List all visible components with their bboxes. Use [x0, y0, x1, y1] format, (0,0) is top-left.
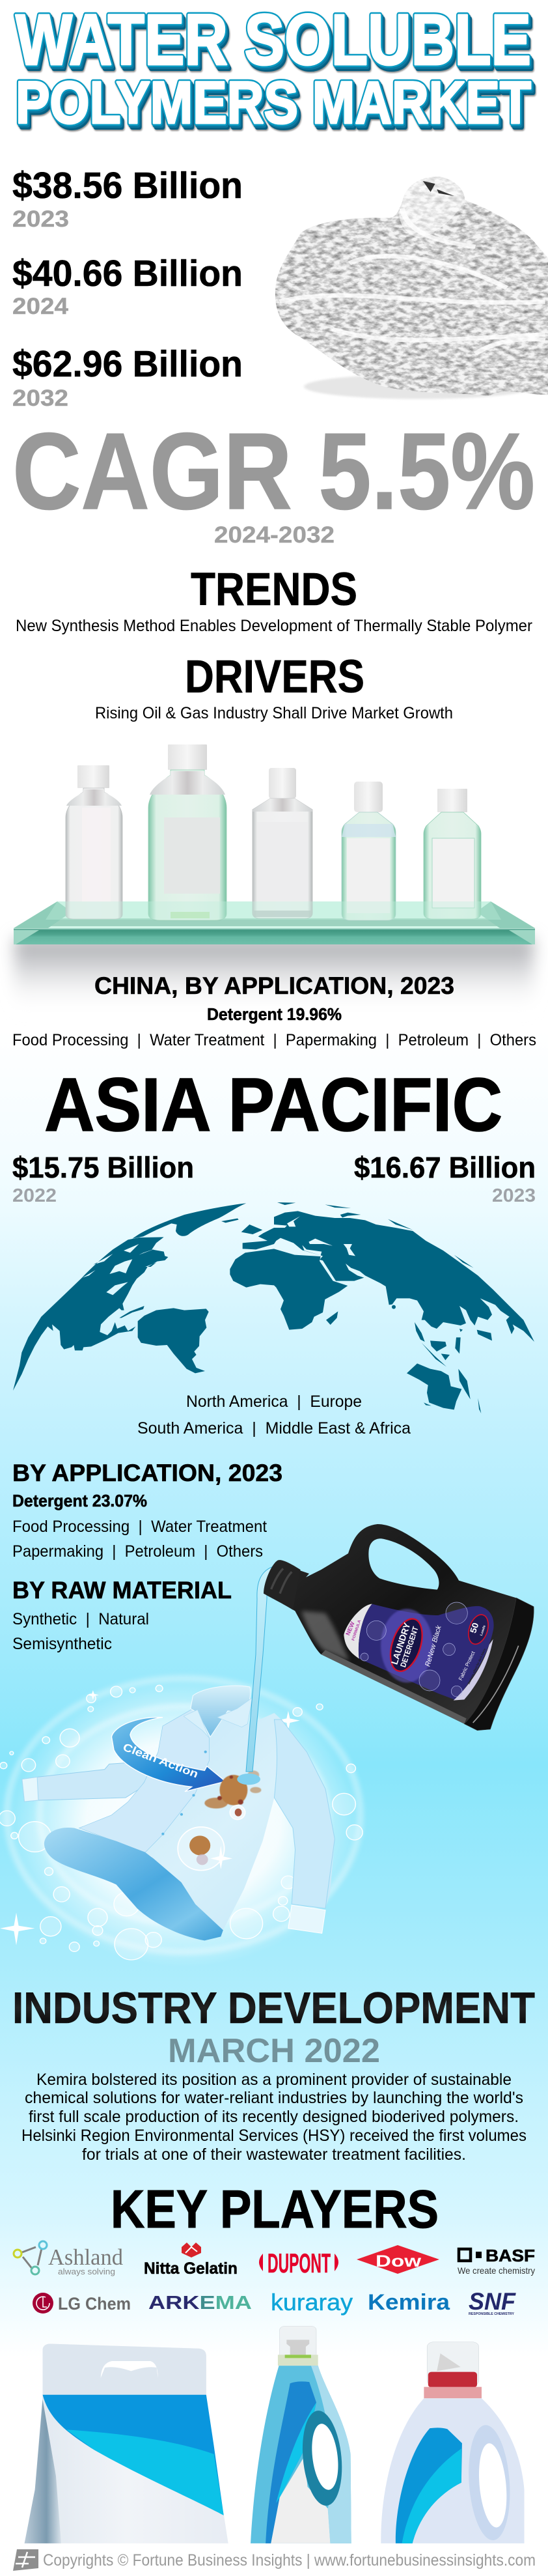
2024 label: 2024	[12, 294, 69, 319]
logo: Ashland: always solving	[58, 2267, 115, 2276]
label text: laundry: LAUNDRY	[389, 1621, 413, 1666]
raw material list line 1: Synthetic | Natural	[12, 1610, 149, 1628]
cap threads	[271, 1568, 292, 1594]
shirt buttons	[161, 1751, 207, 1835]
logo: SNF: SNF	[469, 2288, 516, 2315]
label text: fabric protect: Fabric Protect	[458, 1650, 476, 1682]
logo: Kuraray: kuraray	[271, 2289, 353, 2315]
label purple part	[359, 1604, 494, 1700]
market size figures	[12, 165, 243, 411]
Asia Pacific 2023 label: 2023	[492, 1185, 536, 1206]
label text: fifty: 50	[468, 1621, 480, 1634]
bottle body and handle	[269, 1524, 534, 1731]
industry development body: first full scale production of its recently designed bioderived polymers.	[29, 2108, 519, 2126]
shelf tint seen through bottles	[46, 901, 501, 920]
label bubbles	[361, 1602, 467, 1697]
industry development body	[21, 2071, 527, 2164]
detergent stream	[246, 1566, 273, 1772]
logo: LG Chem	[33, 2293, 131, 2314]
Asia Pacific 2022 value: $15.75 Billion	[12, 1151, 194, 1184]
detergent splash	[237, 1774, 260, 1785]
shirt body	[79, 1708, 335, 1930]
2024 value: $40.66 Billion	[12, 253, 243, 294]
badge oval	[465, 1612, 492, 1647]
footer logo	[13, 2549, 38, 2571]
China detergent share: Detergent 19.96%	[207, 1004, 342, 1024]
industry development body: Kemira bolstered its position as a prominent provider of sustainable	[36, 2071, 512, 2089]
clean action arrow	[111, 1718, 225, 1792]
left sleeve	[22, 1763, 149, 1802]
label text: detergent: DETERGENT	[398, 1625, 420, 1669]
application list line 2: Papermaking | Petroleum | Others	[12, 1542, 263, 1561]
product: detergent pouch	[25, 2344, 228, 2543]
label text: fine print: Darkens effect for dark fabric	[467, 1648, 487, 1684]
2032 value: $62.96 Billion	[12, 343, 243, 385]
bottle 1	[66, 765, 122, 919]
application list line 1: Food Processing | Water Treatment	[12, 1518, 267, 1536]
detergent bottle	[264, 1524, 534, 1731]
bottle cap	[264, 1560, 301, 1610]
logo: Dow	[357, 2245, 439, 2274]
clean action label: Clean Action	[121, 1740, 200, 1780]
2032 label: 2032	[12, 386, 68, 411]
regions list line 2: South America | Middle East & Africa	[137, 1419, 411, 1437]
raw material list line 2: Semisynthetic	[12, 1635, 112, 1653]
product packaging group	[25, 2327, 524, 2543]
logo: BASF: BASF	[486, 2246, 535, 2265]
trends heading: TRENDS	[191, 564, 357, 616]
label oval	[385, 1615, 428, 1675]
logo: Kemira: Kemira	[368, 2290, 450, 2315]
logo: Dow: Dow	[376, 2252, 422, 2271]
industry development body: Helsinki Region Environmental Services (HSY) received the first volumes	[21, 2127, 527, 2145]
Greenland	[132, 1203, 246, 1239]
bubbles	[0, 1685, 363, 1960]
collar inside	[191, 1686, 251, 1737]
eastern hemisphere	[243, 1202, 534, 1413]
British Isles	[241, 1224, 262, 1234]
logo: Nitta Gelatin	[144, 2243, 238, 2278]
product: white handled bottle	[381, 2342, 525, 2543]
right cuff	[288, 1905, 325, 1933]
logo: Nitta Gelatin: Nitta Gelatin	[144, 2259, 238, 2278]
key players heading: KEY PLAYERS	[111, 2179, 439, 2239]
logo: DuPont	[259, 2248, 338, 2278]
stain bubble large	[178, 1827, 232, 1871]
by raw material heading: BY RAW MATERIAL	[12, 1577, 232, 1604]
stain bubble small	[230, 1805, 245, 1820]
glass shelf	[14, 901, 535, 944]
Iceland	[221, 1219, 239, 1223]
logo: SNF: RESPONSIBLE CHEMISTRY	[469, 2312, 515, 2316]
regions list line 1: North America | Europe	[186, 1393, 362, 1411]
bottle 5	[424, 789, 481, 919]
illustration: shirt with cleaning action	[0, 1676, 363, 1967]
logo: Arkema: ARK EMA	[148, 2293, 252, 2314]
front shirt panel	[79, 1708, 209, 1852]
Asia Pacific 2022 label: 2022	[12, 1185, 57, 1206]
world map globe	[13, 1202, 534, 1413]
China application list: Food Processing | Water Treatment | Papermaking | Petroleum | Others	[12, 1031, 536, 1049]
bottle 4	[342, 782, 396, 920]
image: clear polymer gel blob	[275, 177, 548, 399]
logo: BASF	[458, 2246, 535, 2276]
China by application heading: CHINA, BY APPLICATION, 2023	[94, 972, 454, 999]
Asia Pacific 2023 value: $16.67 Billion	[354, 1151, 536, 1184]
Africa west	[230, 1249, 348, 1330]
label text: new: NEW	[344, 1621, 356, 1636]
collar flap right	[217, 1698, 252, 1727]
label white part	[344, 1604, 372, 1659]
Caribbean islands	[119, 1306, 144, 1318]
western hemisphere	[13, 1203, 348, 1391]
label text: formula: FORMULA	[351, 1619, 362, 1641]
shelf shadow	[14, 938, 534, 1013]
South America	[138, 1308, 209, 1373]
bottle body highlight	[301, 1611, 349, 1661]
industry development body: chemical solutions for water-reliant industries by launching the world's	[25, 2089, 523, 2107]
label glow	[381, 1609, 433, 1682]
label text: renew black: ReNew Black	[424, 1624, 443, 1667]
bottle 3	[253, 768, 312, 918]
Asian islands	[415, 1322, 492, 1413]
industry development body: for trials at one of their wastewater treatment facilities.	[82, 2145, 466, 2164]
company logos	[14, 2241, 535, 2316]
Eurasia	[243, 1211, 534, 1342]
glow and ripple rings	[7, 1676, 361, 1967]
logo: DuPont: DUPONT	[267, 2248, 331, 2278]
Arctic islands	[277, 1202, 474, 1268]
by application heading: BY APPLICATION, 2023	[12, 1460, 282, 1486]
drivers heading: DRIVERS	[185, 651, 364, 703]
Madagascar	[326, 1311, 338, 1325]
logo: Ashland: Ashland	[48, 2244, 123, 2270]
logo: Ashland	[14, 2241, 123, 2276]
Asia Pacific heading: ASIA PACIFIC	[44, 1062, 502, 1147]
CAGR period: 2024-2032	[214, 522, 335, 548]
bottom hem	[44, 1828, 223, 1940]
logo: LG Chem: LG Chem	[58, 2294, 131, 2314]
2023 label: 2023	[12, 206, 69, 232]
detergent share: Detergent 23.07%	[12, 1491, 147, 1510]
industry development date: MARCH 2022	[168, 2032, 380, 2070]
sparkles	[0, 1690, 300, 1946]
bottle base ring	[464, 1598, 534, 1731]
Australia	[407, 1363, 461, 1409]
collar flap left	[184, 1710, 209, 1738]
trends text: New Synthesis Method Enables Development of Thermally Stable Polymer	[16, 617, 532, 635]
label lavender strip	[454, 1639, 493, 1701]
North America	[13, 1237, 168, 1391]
logo: BASF: We create chemistry	[458, 2265, 535, 2276]
bottle 2	[148, 744, 226, 920]
Sri Lanka	[392, 1305, 396, 1309]
right sleeve shading	[274, 1720, 335, 1908]
bottle base shine	[473, 1646, 519, 1723]
product: slim blue bottle	[251, 2327, 351, 2543]
stain on shirt	[204, 1770, 261, 1809]
title	[16, 0, 531, 136]
label text: loads: Loads	[480, 1624, 487, 1636]
bottle bottom highlight	[321, 1650, 467, 1724]
bottles on shelf	[66, 744, 481, 920]
2023 value: $38.56 Billion	[12, 165, 243, 206]
left cuff	[22, 1777, 38, 1802]
drivers text: Rising Oil & Gas Industry Shall Drive Market Growth	[95, 704, 453, 722]
